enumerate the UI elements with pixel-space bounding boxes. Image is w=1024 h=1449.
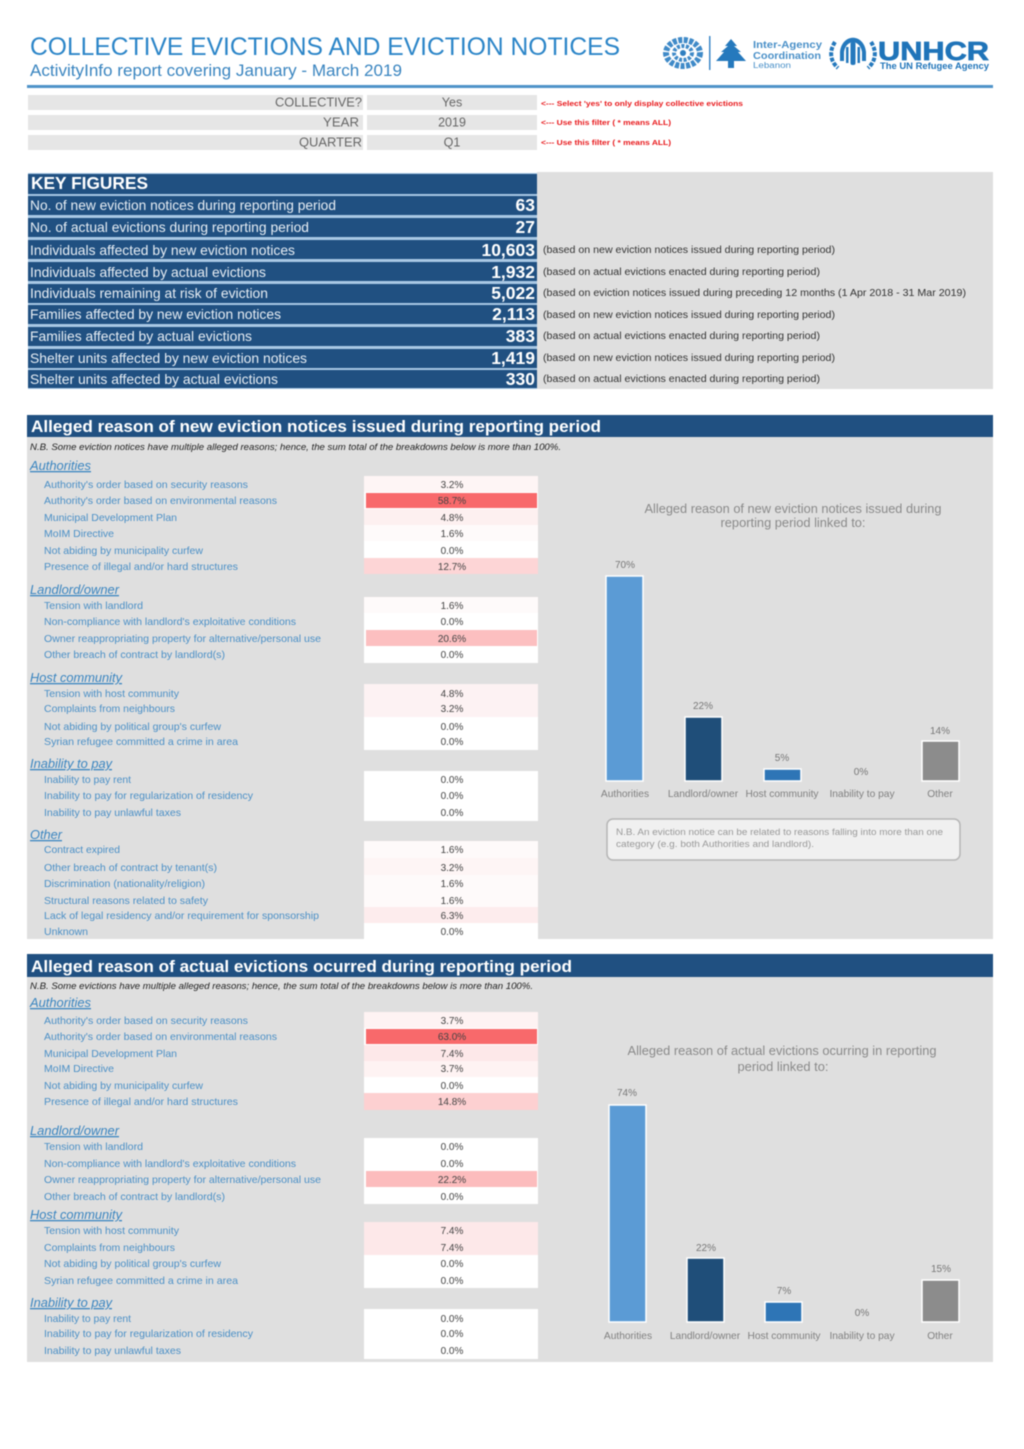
bar chart: new eviction notices: Inability to pay [829, 789, 895, 800]
table group: landlord/owner: 0.0% [441, 650, 464, 661]
bar chart: new eviction notices: 5% [775, 753, 789, 764]
bar chart: actual evictions: 7% [777, 1286, 791, 1297]
table group: inability to pay: Inability to pay rent [44, 774, 131, 786]
callout: N.B. An eviction notice can be related to reasons falling into more than one [616, 827, 943, 837]
title: COLLECTIVE EVICTIONS AND EVICTION NOTICES [30, 33, 620, 61]
table group: other: Unknown [44, 926, 88, 938]
bar chart: new eviction notices: Authorities [601, 789, 649, 800]
filters panel: 2019 [438, 116, 466, 130]
bar chart: new eviction notices: Host community [745, 789, 819, 800]
table group: authorities: MoIM Directive [44, 528, 114, 540]
panel: key figures: Families affected by actual evictions [30, 328, 252, 344]
table group: host community: Tension with host community [44, 1225, 180, 1237]
table group: landlord/owner: Other breach of contract by landlord(s) [44, 649, 225, 661]
UNHCR wordmark: UNHCR [878, 36, 989, 66]
table group: host community: Syrian refugee committed a crime in area [44, 1275, 238, 1287]
table group: other: Other [30, 827, 63, 842]
table group: inability to pay [30, 1295, 538, 1359]
panel: key figures [28, 172, 993, 389]
table group: host community: Not abiding by political group's curfew [44, 721, 221, 733]
table group: authorities [29, 458, 538, 574]
icon: UNHCR emblem [831, 38, 875, 68]
table group: authorities: Authorities [29, 458, 91, 473]
inter-agency text: Lebanon [753, 61, 791, 70]
filters panel: <--- Use this filter ( * means ALL) [541, 118, 672, 127]
panel: key figures: 10,603 [481, 240, 535, 260]
table group: authorities: 58.7% [438, 496, 466, 507]
table group: other: Structural reasons related to safety [44, 895, 209, 907]
table group: host community [30, 1207, 538, 1288]
table group: authorities: 3.7% [441, 1064, 464, 1075]
table group: other: 0.0% [441, 927, 464, 938]
table group: landlord/owner: Tension with landlord [44, 1141, 143, 1153]
bar chart: actual evictions: Other [927, 1331, 953, 1342]
filters panel: QUARTER [299, 136, 362, 150]
panel: key figures: (based on new eviction notices issued during reporting period) [543, 245, 835, 256]
table group: authorities: 12.7% [438, 562, 466, 573]
heading: new eviction notices: Alleged reason of new eviction notices issued during reporting period [31, 417, 601, 436]
inter-agency text: Coordination [753, 50, 821, 62]
table group: landlord/owner [30, 1123, 538, 1204]
panel: key figures: Shelter units affected by new eviction notices [30, 350, 307, 366]
table group: other: 3.2% [441, 863, 464, 874]
table group: host community: 7.4% [441, 1243, 464, 1254]
table group: authorities: Authority's order based on environmental reasons [44, 495, 277, 507]
table group: host community: 0.0% [441, 1276, 464, 1287]
table group: host community: Host community [30, 670, 123, 685]
table group: other [30, 827, 538, 939]
table group: inability to pay: 0.0% [441, 775, 464, 786]
table group: other: 6.3% [441, 911, 464, 922]
bar chart: new eviction notices [601, 501, 959, 800]
bar chart: actual evictions: 74% [617, 1088, 637, 1099]
table group: authorities: Authority's order based on security reasons [44, 479, 248, 491]
table group: landlord/owner: Landlord/owner [30, 582, 120, 597]
panel: key figures: Shelter units affected by actual evictions [30, 371, 278, 387]
table group: host community: 4.8% [441, 689, 464, 700]
table group: landlord/owner: Non-compliance with landlord's exploitative conditions [44, 616, 296, 628]
table group: authorities: 7.4% [441, 1049, 464, 1060]
panel: key figures: Individuals remaining at risk of eviction [30, 285, 268, 301]
table group: inability to pay: 0.0% [441, 791, 464, 802]
table group: inability to pay: 0.0% [441, 1314, 464, 1325]
table group: host community: Host community [30, 1207, 123, 1222]
inter-agency text [753, 39, 822, 70]
table group: authorities: Authority's order based on environmental reasons [44, 1031, 277, 1043]
table group: authorities: Not abiding by municipality curfew [44, 1080, 203, 1092]
panel: key figures: 1,419 [491, 348, 535, 368]
subtitle: ActivityInfo report covering January - March 2019 [30, 61, 402, 80]
table group: landlord/owner [30, 582, 538, 663]
table group: inability to pay: 0.0% [441, 808, 464, 819]
table group: inability to pay: Inability to pay [30, 1295, 113, 1310]
table group: landlord/owner: Other breach of contract by landlord(s) [44, 1191, 225, 1203]
callout: category (e.g. both Authorities and landlord). [616, 839, 814, 849]
table group: host community: Tension with host community [44, 688, 180, 700]
note: N.B. Some eviction notices have multiple alleged reasons; hence, the sum total of the breakdowns below is more than 100%. [30, 442, 561, 452]
bar chart: new eviction notices: 0% [854, 767, 868, 778]
table group: landlord/owner: 0.0% [441, 1192, 464, 1203]
table group: landlord/owner: 1.6% [441, 601, 464, 612]
table group: inability to pay: Inability to pay rent [44, 1313, 131, 1325]
table group: other: 1.6% [441, 896, 464, 907]
bar chart: actual evictions: Alleged reason of actual evictions ocurring in reporting [628, 1043, 936, 1058]
table group: inability to pay: Inability to pay unlawful taxes [44, 1345, 181, 1357]
panel: key figures: (based on new eviction notices issued during reporting period) [543, 353, 835, 364]
table group: host community: Syrian refugee committed a crime in area [44, 736, 238, 748]
icon: cedar [716, 39, 746, 68]
table group: inability to pay: Inability to pay for regularization of residency [44, 790, 254, 802]
panel: key figures: 2,113 [492, 304, 535, 324]
note: N.B. Some evictions have multiple alleged reasons; hence, the sum total of the breakdowns below is more than 100%. [30, 981, 533, 991]
table group: authorities: 0.0% [441, 1081, 464, 1092]
filters panel: YEAR [323, 116, 359, 130]
heading: actual evictions [27, 954, 993, 977]
table group: landlord/owner: Landlord/owner [30, 1123, 120, 1138]
panel: key figures: (based on actual evictions enacted during reporting period) [543, 374, 820, 385]
panel: key figures: 330 [506, 369, 535, 389]
filters panel: Yes [442, 96, 462, 110]
heading: new eviction notices [27, 415, 993, 437]
bar chart: new eviction notices: 22% [693, 701, 713, 712]
table group: landlord/owner: 0.0% [441, 617, 464, 628]
table group: authorities: 0.0% [441, 546, 464, 557]
table group: host community: 0.0% [441, 1259, 464, 1270]
table group: authorities: Municipal Development Plan [44, 512, 177, 524]
panel: key figures: (based on eviction notices issued during preceding 12 months (1 Apr 2018 - 31 Mar 2019) [543, 288, 966, 299]
table group: authorities: MoIM Directive [44, 1063, 114, 1075]
panel: key figures: 1,932 [491, 262, 535, 282]
panel: new eviction notices [27, 415, 993, 939]
panel: key figures: 383 [506, 326, 535, 346]
table group: inability to pay: Inability to pay [30, 756, 113, 771]
panel: key figures: (based on new eviction notices issued during reporting period) [543, 310, 835, 321]
table group: other: Lack of legal residency and/or requirement for sponsorship [44, 910, 319, 922]
callout [607, 819, 960, 860]
table group: inability to pay: 0.0% [441, 1346, 464, 1357]
panel: key figures: 27 [516, 217, 535, 237]
panel: key figures: Individuals affected by actual evictions [30, 264, 266, 280]
table group: other: Contract expired [44, 844, 120, 856]
bar chart: new eviction notices: Landlord/owner [668, 789, 739, 800]
filters panel [28, 95, 743, 150]
panel: key figures: 63 [516, 195, 535, 215]
panel: key figures: 5,022 [491, 283, 535, 303]
panel: key figures: No. of new eviction notices during reporting period [30, 197, 336, 213]
table group: authorities: Authority's order based on security reasons [44, 1015, 248, 1027]
filters panel: <--- Select 'yes' to only display collective evictions [541, 99, 743, 108]
panel: key figures: (based on actual evictions enacted during reporting period) [543, 331, 820, 342]
panel: key figures: Individuals affected by new eviction notices [30, 242, 295, 258]
panel: key figures: (based on actual evictions enacted during reporting period) [543, 267, 820, 278]
filters panel: <--- Use this filter ( * means ALL) [541, 138, 672, 147]
table group: host community: Not abiding by political group's curfew [44, 1258, 221, 1270]
table group: other: Discrimination (nationality/religion) [44, 878, 205, 890]
table group: authorities: Not abiding by municipality curfew [44, 545, 203, 557]
bar chart: new eviction notices: 70% [615, 560, 635, 571]
table group: landlord/owner: Owner reappropriating property for alternative/personal use [44, 633, 321, 645]
table group: landlord/owner: 22.2% [438, 1175, 466, 1186]
table group: authorities: 4.8% [441, 513, 464, 524]
bar chart: actual evictions: 0% [855, 1308, 869, 1319]
table group: landlord/owner: 20.6% [438, 634, 466, 645]
icon: UN emblem [666, 40, 700, 66]
bar chart: new eviction notices: reporting period linked to: [720, 515, 866, 530]
table group: authorities [29, 995, 538, 1110]
table group: authorities: Municipal Development Plan [44, 1048, 177, 1060]
bar chart: actual evictions: Authorities [604, 1331, 652, 1342]
bar chart: actual evictions: 15% [931, 1264, 951, 1275]
bar chart: new eviction notices: Alleged reason of new eviction notices issued during [644, 501, 942, 516]
table group: authorities: 3.7% [441, 1016, 464, 1027]
table group: inability to pay: Inability to pay for regularization of residency [44, 1328, 254, 1340]
panel: actual evictions [27, 954, 993, 1362]
bar chart: new eviction notices: Other [927, 789, 953, 800]
table group: other: 1.6% [441, 845, 464, 856]
table group: host community: 0.0% [441, 722, 464, 733]
bar chart: new eviction notices: 14% [930, 726, 950, 737]
table group: authorities: 14.8% [438, 1097, 466, 1108]
inter-agency text: Inter-Agency [753, 39, 822, 51]
table group: landlord/owner: 0.0% [441, 1142, 464, 1153]
logos [666, 36, 989, 71]
panel: key figures: Families affected by new eviction notices [30, 306, 281, 322]
logos: The UN Refugee Agency [880, 61, 989, 71]
filters panel: Q1 [444, 136, 460, 150]
table group: landlord/owner: Tension with landlord [44, 600, 143, 612]
table group: host community: 3.2% [441, 704, 464, 715]
panel: key figures: KEY FIGURES [31, 173, 148, 193]
bar chart: actual evictions: period linked to: [738, 1059, 828, 1074]
bar chart: actual evictions: 22% [696, 1243, 716, 1254]
table group: other: 1.6% [441, 879, 464, 890]
filters panel: COLLECTIVE? [275, 96, 362, 110]
table group: host community [30, 670, 538, 750]
table group: host community: Complaints from neighbours [44, 703, 175, 715]
bar chart: actual evictions: Landlord/owner [670, 1331, 741, 1342]
table group: landlord/owner: Owner reappropriating property for alternative/personal use [44, 1174, 321, 1186]
bar chart: actual evictions: Host community [747, 1331, 821, 1342]
heading: actual evictions: Alleged reason of actual evictions ocurred during reporting period [31, 957, 572, 976]
table group: inability to pay: Inability to pay unlawful taxes [44, 807, 181, 819]
table group: authorities: 1.6% [441, 529, 464, 540]
bar chart: actual evictions: Inability to pay [829, 1331, 895, 1342]
table group: host community: 7.4% [441, 1226, 464, 1237]
table group: landlord/owner: 0.0% [441, 1159, 464, 1170]
table group: landlord/owner: Non-compliance with landlord's exploitative conditions [44, 1158, 296, 1170]
table group: host community: Complaints from neighbours [44, 1242, 175, 1254]
panel: key figures: No. of actual evictions during reporting period [30, 219, 309, 235]
table group: inability to pay: 0.0% [441, 1329, 464, 1340]
table group: authorities: 63.0% [438, 1032, 466, 1043]
table group: inability to pay [30, 756, 538, 821]
bar chart: actual evictions [604, 1043, 959, 1342]
table group: other: Other breach of contract by tenant(s) [44, 862, 217, 874]
header rule [27, 85, 993, 88]
table group: authorities: Authorities [29, 995, 91, 1010]
table group: host community: 0.0% [441, 737, 464, 748]
table group: authorities: Presence of illegal and/or hard structures [44, 561, 238, 573]
table group: authorities: Presence of illegal and/or hard structures [44, 1096, 238, 1108]
table group: authorities: 3.2% [441, 480, 464, 491]
